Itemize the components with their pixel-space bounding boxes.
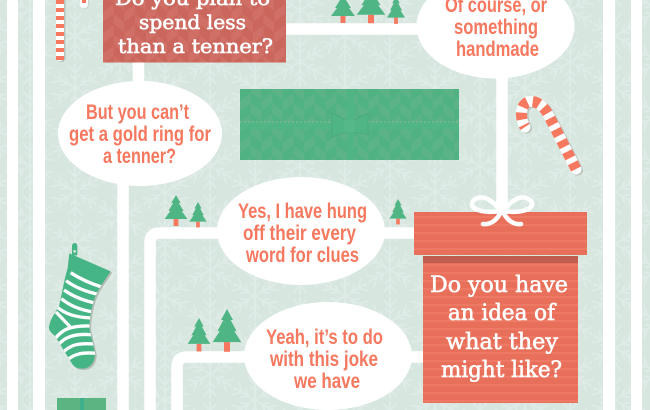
gift body question: might like? (441, 357, 562, 383)
candy cane top left (60, 0, 62, 60)
trees lower (188, 309, 241, 352)
answer bubble: joke: Yeah, it’s to do (266, 326, 383, 349)
trees middle (165, 195, 407, 227)
small green gift (57, 398, 106, 410)
green gift wide (240, 89, 459, 160)
gift body question (423, 256, 578, 403)
answer bubble: gold ring (58, 81, 222, 186)
flowchart connector lines (123, 29, 502, 410)
answer bubble: of course (416, 0, 574, 78)
gift body question: an idea of (448, 300, 557, 326)
answer bubble: of course: handmade (456, 38, 539, 61)
answer bubble: joke: we have (293, 370, 360, 393)
question box: spend less than a tenner: spend less (139, 10, 246, 34)
stocking (49, 243, 112, 370)
answer bubble: gold ring: get a gold ring for (69, 123, 211, 146)
candy cane right (521, 101, 578, 170)
answer bubble: hung off every word: Yes, I have hung (238, 200, 367, 223)
answer bubble: hung off every word (217, 177, 385, 285)
ribbon bow (472, 197, 532, 224)
answer bubble: joke (244, 302, 412, 410)
answer bubble: gold ring: But you can’t (86, 101, 189, 124)
answer bubble: hung off every word: word for clues (245, 244, 359, 267)
answer bubble: gold ring: a tenner? (103, 145, 176, 168)
gift body question: Do you have (430, 272, 568, 298)
candy cane end top (80, 0, 88, 5)
border stripes left (7, 0, 45, 410)
trees top (331, 0, 405, 24)
answer bubble: hung off every word: off their every (243, 222, 356, 245)
answer bubble: joke: with this joke (269, 348, 378, 371)
question box: spend less than a tenner (103, 0, 286, 62)
gift lid (414, 212, 587, 255)
question box: spend less than a tenner: than a tenner? (118, 34, 273, 58)
border stripes right (603, 0, 642, 410)
answer bubble: of course: something (454, 16, 538, 39)
gift body question: what they (446, 329, 558, 355)
